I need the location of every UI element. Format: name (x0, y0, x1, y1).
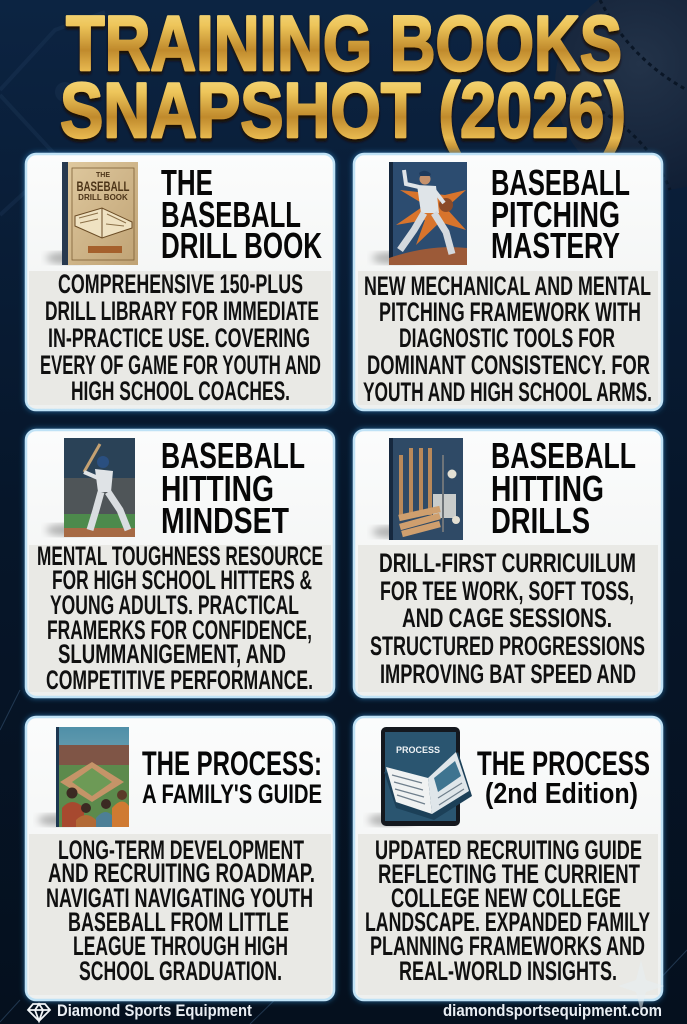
description: LEAGUE THROUGH HIGH (73, 931, 288, 961)
panel: The Process (2nd Edition) (354, 717, 662, 1000)
title text: MASTERY (491, 225, 620, 266)
icon: tablet with open book (368, 727, 472, 826)
brand name: Diamond Sports Equipment (57, 1002, 252, 1020)
footer (28, 1002, 662, 1021)
icon: drill book cover (46, 162, 138, 265)
title text: BASEBALL (491, 162, 630, 203)
title text: PITCHING (491, 194, 620, 235)
title text (142, 745, 322, 809)
description (370, 548, 645, 689)
title text: THE (161, 162, 213, 203)
title text (161, 162, 322, 266)
description: SLUMMANIGEMENT, AND (58, 639, 286, 669)
icon: drill book cover: DRILL BOOK (78, 193, 128, 202)
title text: BASEBALL (161, 194, 301, 235)
icon: drill book cover: THE (96, 172, 110, 179)
title text (161, 435, 305, 541)
description: NAVIGATI NAVIGATING YOUTH (46, 883, 313, 913)
description (40, 269, 321, 406)
description: COMPREHENSIVE 150-PLUS (58, 269, 303, 299)
title text: HITTING (491, 468, 604, 509)
title text: MINDSET (161, 500, 289, 541)
panel: Baseball Pitching Mastery (354, 154, 662, 410)
icon: drill book cover: BASEBALL (76, 178, 130, 194)
icon: sparkle (618, 960, 664, 1012)
panel: Baseball Hitting Drills (354, 430, 662, 697)
icon: pitcher cover (372, 162, 467, 265)
icon: bats cover (372, 438, 463, 540)
description (46, 835, 315, 986)
title text: A FAMILY'S GUIDE (142, 779, 322, 809)
description: SCHOOL GRADUATION. (79, 956, 282, 986)
title text (491, 162, 630, 266)
icon: family ballpark cover (38, 727, 129, 827)
description: FRAMERKS FOR CONFIDENCE, (47, 615, 312, 645)
title text: THE PROCESS: (142, 745, 322, 783)
title text: BASEBALL (491, 435, 636, 476)
description (363, 271, 652, 407)
panel: The Baseball Drill Book (26, 154, 334, 410)
panel: The Process: A Family's Guide (26, 717, 334, 1000)
description: FOR HIGH SCHOOL HITTERS & (52, 565, 312, 595)
description: IN-PRACTICE USE. COVERING (48, 323, 310, 353)
description: HIGH SCHOOL COACHES. (71, 376, 290, 406)
description (365, 835, 650, 986)
website: diamondsportsequipment.com (443, 1002, 662, 1020)
description: AND RECRUITING ROADMAP. (48, 858, 315, 888)
title text: (2nd Edition) (485, 778, 638, 810)
panel: Baseball Hitting Mindset (26, 430, 334, 697)
title text (477, 745, 650, 810)
title text: HITTING (161, 468, 274, 509)
title text: DRILL BOOK (161, 225, 322, 266)
description: BASEBALL FROM LITTLE (68, 907, 289, 937)
description: LONG-TERM DEVELOPMENT (58, 835, 304, 865)
description: MENTAL TOUGHNESS RESOURCE (37, 541, 323, 571)
icon: diamond logo (28, 1004, 50, 1021)
description (37, 541, 323, 695)
title text: BASEBALL (161, 435, 305, 476)
description: EVERY OF GAME FOR YOUTH AND (40, 350, 321, 380)
description: YOUNG ADULTS. PRACTICAL (50, 590, 299, 620)
title text (491, 435, 636, 541)
icon: batter cover (46, 438, 135, 537)
description: COMPETITIVE PERFORMANCE. (46, 665, 313, 695)
title (60, 0, 626, 154)
title text: DRILLS (491, 500, 590, 541)
description: DRILL LIBRARY FOR IMMEDIATE (45, 296, 319, 326)
description: AND CAGE SESSIONS. (402, 603, 612, 633)
icon: tablet with open book: PROCESS (396, 745, 440, 755)
